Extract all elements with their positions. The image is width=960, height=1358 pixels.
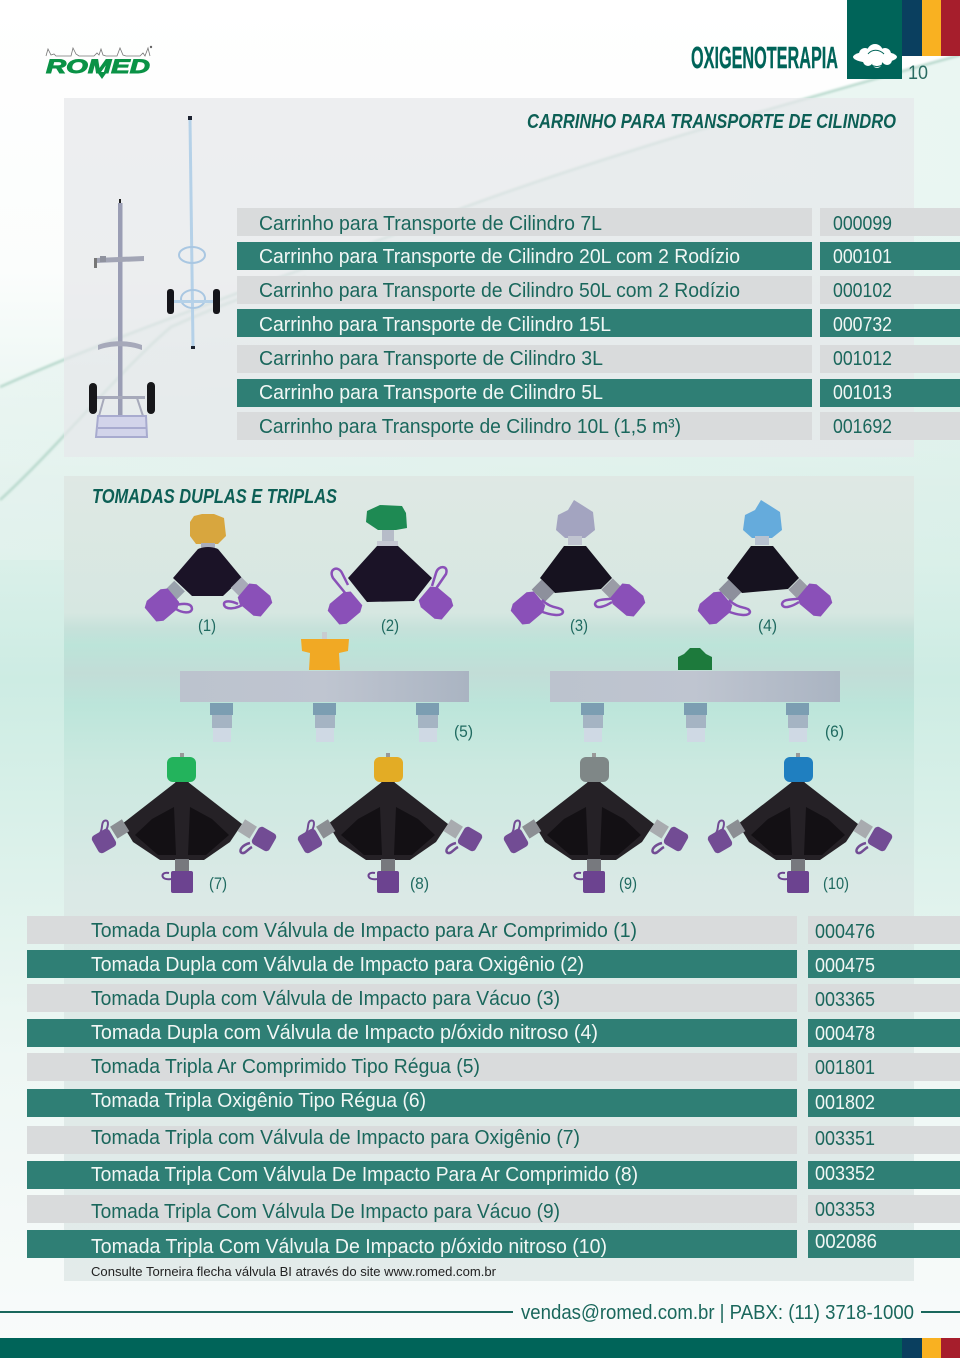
product 5: manifold yellow bbox=[180, 632, 469, 742]
table: tomadas products: Tomada Tripla Com Válvula De Impacto p/óxido nitroso (10) bbox=[91, 1236, 607, 1258]
table: carrinho products: Carrinho para Transporte de Cilindro 20L com 2 Rodízio bbox=[259, 246, 740, 268]
product 10: triple outlet bbox=[706, 753, 894, 893]
product 9: triple outlet bbox=[502, 753, 690, 893]
table: carrinho products: Carrinho para Transporte de Cilindro 50L com 2 Rodízio bbox=[259, 280, 740, 302]
table: tomadas products: Tomada Dupla com Válvula de Impacto para Ar Comprimido (1) bbox=[91, 920, 637, 942]
label 3: (3) bbox=[570, 616, 588, 635]
table: tomadas products: 001802 bbox=[815, 1092, 875, 1114]
label 9: (9) bbox=[619, 874, 637, 893]
table: tomadas products: 000476 bbox=[815, 921, 875, 943]
label 4: (4) bbox=[758, 616, 777, 635]
header colour tabs and cloud icon bbox=[847, 0, 960, 79]
heading: carrinho: CARRINHO PARA TRANSPORTE DE CILINDRO bbox=[527, 111, 896, 133]
icon: trolley left bbox=[89, 199, 155, 437]
table: tomadas products: Tomada Dupla com Válvula de Impacto para Vácuo (3) bbox=[91, 988, 560, 1010]
label 1: (1) bbox=[198, 616, 216, 635]
table: tomadas products: 003365 bbox=[815, 989, 875, 1011]
footer contact: vendas@romed.com.br | PABX: (11) 3718-1000 bbox=[521, 1302, 914, 1324]
table: carrinho products: 001013 bbox=[833, 382, 892, 404]
label 2: (2) bbox=[381, 616, 399, 635]
table: carrinho products: Carrinho para Transporte de Cilindro 15L bbox=[259, 314, 611, 336]
table: carrinho products: Carrinho para Transporte de Cilindro 5L bbox=[259, 382, 603, 404]
table: carrinho products bbox=[237, 208, 960, 440]
table: tomadas products: Tomada Tripla Com Válvula De Impacto Para Ar Comprimido (8) bbox=[91, 1164, 638, 1186]
table: carrinho products: 000732 bbox=[833, 314, 892, 336]
table: tomadas products: Tomada Tripla com Válvula de Impacto para Oxigênio (7) bbox=[91, 1127, 580, 1149]
label 8: (8) bbox=[410, 874, 429, 893]
footer colour bar bbox=[0, 1338, 960, 1358]
icon: trolley right bbox=[167, 116, 220, 349]
product 7: triple outlet bbox=[90, 753, 278, 893]
table: carrinho products: 000101 bbox=[833, 246, 892, 268]
label 10: (10) bbox=[823, 874, 849, 893]
product 1: dual outlet bbox=[142, 514, 275, 625]
panel: tomadas bbox=[64, 476, 914, 1281]
footnote: Consulte Torneira flecha válvula BI através do site www.romed.com.br bbox=[91, 1264, 497, 1279]
table: tomadas products: 003351 bbox=[815, 1128, 875, 1150]
product 2: dual outlet bbox=[325, 505, 456, 628]
product 3: dual outlet bbox=[508, 500, 648, 628]
table: tomadas products: Tomada Tripla Com Válvula De Impacto para Vácuo (9) bbox=[91, 1201, 560, 1223]
product 4: dual outlet bbox=[695, 500, 835, 628]
page number: 10 bbox=[908, 63, 928, 84]
table: carrinho products: Carrinho para Transporte de Cilindro 10L (1,5 m³) bbox=[259, 416, 681, 438]
table: tomadas products: 003353 bbox=[815, 1199, 875, 1221]
table: carrinho products: 000099 bbox=[833, 213, 892, 235]
table: tomadas products: 003352 bbox=[815, 1163, 875, 1185]
table: tomadas products: Tomada Tripla Ar Comprimido Tipo Régua (5) bbox=[91, 1056, 480, 1078]
table: carrinho products: 001012 bbox=[833, 348, 892, 370]
logo: Romed bbox=[46, 46, 152, 79]
table: carrinho products: 001692 bbox=[833, 416, 892, 438]
label 5: (5) bbox=[454, 722, 473, 741]
heading: tomadas: TOMADAS DUPLAS E TRIPLAS bbox=[92, 486, 338, 508]
table: tomadas products: 002086 bbox=[815, 1231, 877, 1253]
panel: carrinho bbox=[64, 98, 914, 457]
table: carrinho products: 000102 bbox=[833, 280, 892, 302]
table: tomadas products: Tomada Dupla com Válvula de Impacto p/óxido nitroso (4) bbox=[91, 1022, 598, 1044]
table: tomadas products: 000475 bbox=[815, 955, 875, 977]
table: carrinho products: Carrinho para Transporte de Cilindro 7L bbox=[259, 213, 602, 235]
table: carrinho products: Carrinho para Transporte de Cilindro 3L bbox=[259, 348, 603, 370]
logo: Romed: ROMED bbox=[46, 57, 150, 78]
product 8: triple outlet bbox=[296, 753, 484, 893]
table: tomadas products bbox=[27, 916, 960, 1258]
label 7: (7) bbox=[209, 874, 227, 893]
table: tomadas products: 000478 bbox=[815, 1023, 875, 1045]
label 6: (6) bbox=[825, 722, 844, 741]
table: tomadas products: Tomada Tripla Oxigênio Tipo Régua (6) bbox=[91, 1090, 426, 1112]
table: tomadas products: Tomada Dupla com Válvula de Impacto para Oxigênio (2) bbox=[91, 954, 584, 976]
product 6: manifold green bbox=[550, 648, 840, 742]
table: tomadas products: 001801 bbox=[815, 1057, 875, 1079]
